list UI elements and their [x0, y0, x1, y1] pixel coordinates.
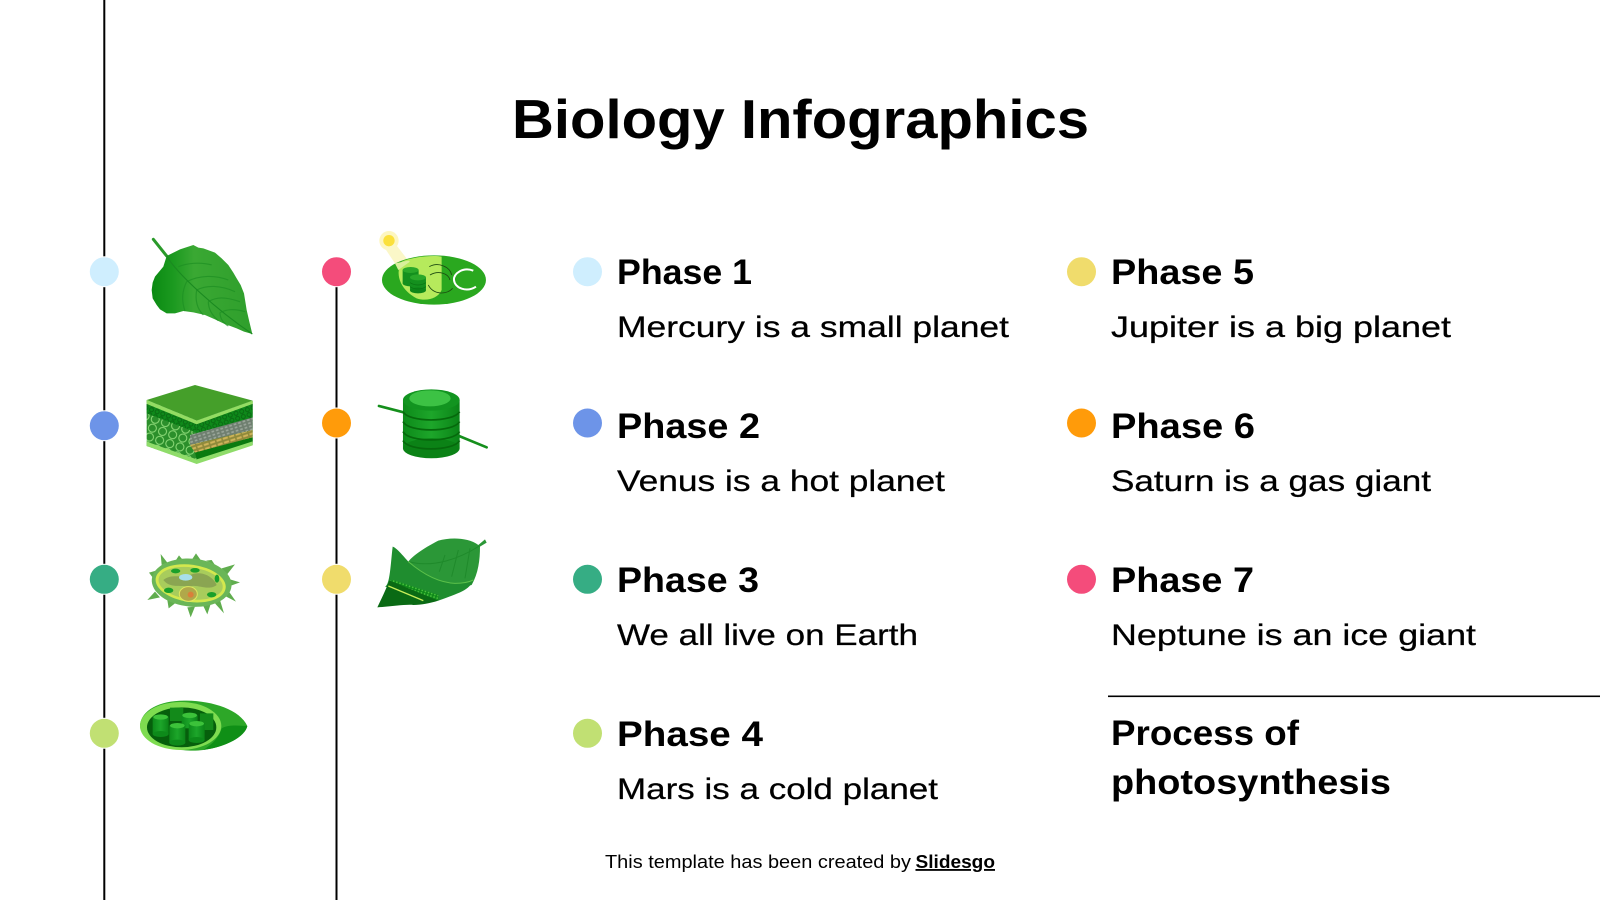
icon: thylakoid stack: [379, 389, 487, 458]
icon: leaf tissue block: [147, 385, 253, 464]
icon: chloroplast with sun: [379, 231, 486, 305]
timeline dot 3: [90, 565, 119, 594]
icon: plant cell: [147, 553, 240, 617]
icon: leaf: [152, 239, 252, 334]
phase 6: Phase 6: [1111, 407, 1255, 446]
phase 4: Phase 4: [617, 715, 764, 754]
divider rule: [1108, 696, 1600, 697]
title: Biology Infographics: [512, 88, 1089, 150]
icon: chloroplast cutaway: [140, 701, 247, 751]
phase 4: [573, 715, 939, 806]
phase 2: [573, 407, 946, 498]
phase 6: [1067, 407, 1432, 498]
footer credit: This template has been created by: [605, 851, 912, 872]
timeline dot 7: [322, 257, 351, 286]
phase 1: [573, 253, 1010, 344]
phase 3: Phase 3: [617, 561, 759, 600]
subtitle: process of photosynthesis: [1111, 714, 1391, 802]
phase 6: Saturn is a gas giant: [1111, 465, 1432, 498]
timeline dot 6: [322, 408, 351, 438]
phase 7: Phase 7: [1111, 561, 1254, 600]
phase 5: [1067, 253, 1452, 344]
phase 4: Mars is a cold planet: [617, 773, 939, 806]
phase 5: Phase 5: [1111, 253, 1254, 292]
timeline dot 2: [90, 411, 119, 440]
subtitle: process of photosynthesis: Process of: [1111, 714, 1299, 753]
phase 1: Phase 1: [617, 253, 752, 292]
footer credit: Slidesgo: [916, 851, 995, 872]
phase 5: Jupiter is a big planet: [1111, 311, 1452, 344]
icon: folded leaf cross-section: [377, 539, 487, 607]
phase 2: Phase 2: [617, 407, 760, 446]
phase 3: We all live on Earth: [617, 619, 918, 652]
subtitle: process of photosynthesis: photosynthesis: [1111, 763, 1391, 802]
phase 7: [1067, 561, 1477, 652]
timeline line right: [336, 272, 338, 900]
phase 3: [573, 561, 918, 652]
phase 2: Venus is a hot planet: [617, 465, 946, 498]
phase 7: Neptune is an ice giant: [1111, 619, 1477, 652]
timeline dot 4: [90, 719, 119, 748]
timeline dot 1: [90, 257, 119, 286]
phase 1: Mercury is a small planet: [617, 311, 1010, 344]
timeline line left: [103, 0, 105, 900]
timeline dot 5: [322, 565, 351, 594]
